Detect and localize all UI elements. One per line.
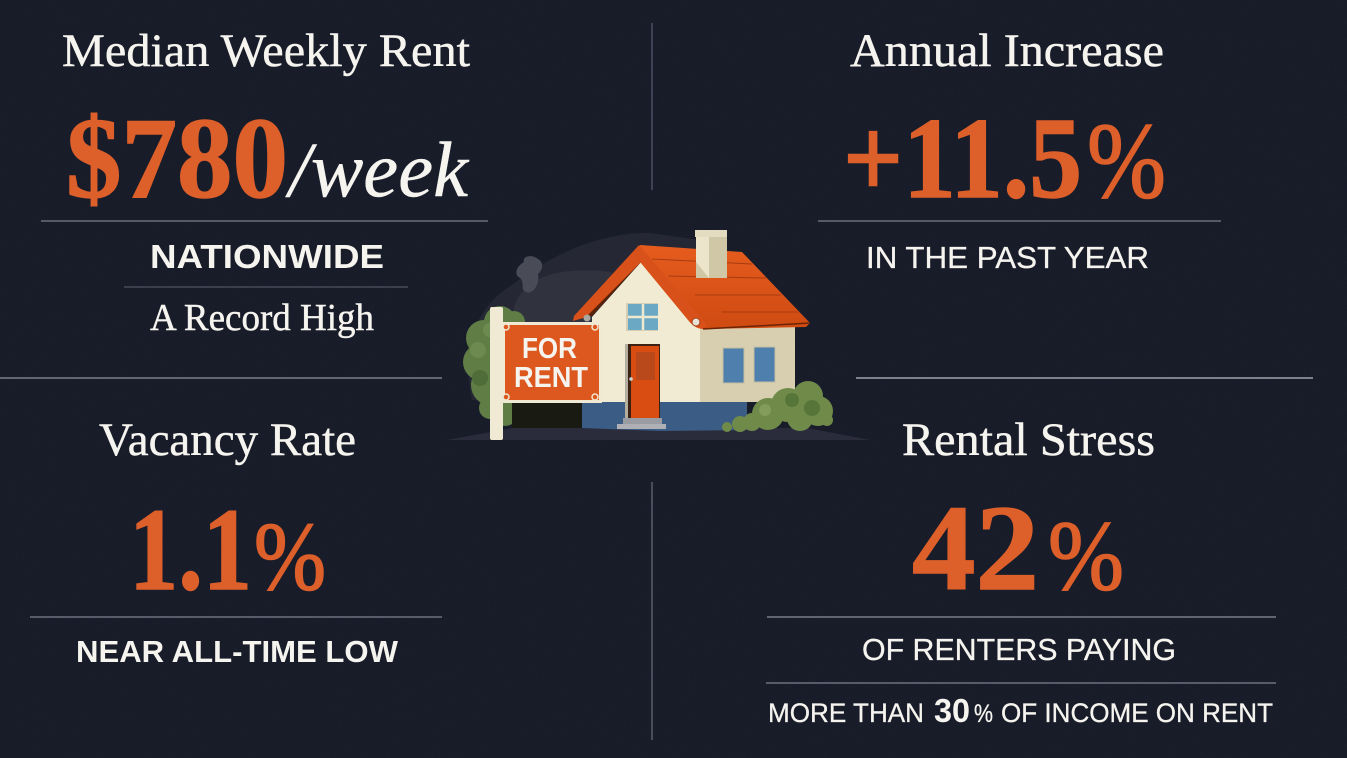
ground — [447, 428, 870, 440]
bush — [722, 381, 833, 432]
note: more than 30% of income on rent: % — [974, 700, 993, 728]
foundation — [582, 402, 747, 431]
illustration: house with for rent sign — [447, 230, 870, 440]
for rent sign: RENT — [514, 362, 588, 394]
label: in the past year: IN THE PAST YEAR — [866, 240, 1149, 275]
figure: +11.5%: % — [1087, 102, 1166, 221]
figure: $780: $780 — [66, 95, 288, 222]
backdrop glow — [468, 233, 700, 400]
note: more than 30% of income on rent: MORE THAN — [768, 698, 924, 728]
label: near all-time low: NEAR ALL-TIME LOW — [76, 634, 399, 669]
sign post — [490, 307, 503, 440]
figure: 1.1%: 1.1 — [129, 484, 252, 615]
label: nationwide: NATIONWIDE — [150, 238, 384, 275]
panel: vacancy rate — [30, 414, 442, 669]
figure: 42%: % — [1048, 500, 1124, 611]
heading: vacancy rate: Vacancy Rate — [99, 414, 356, 466]
note: more than 30% of income on rent: OF INCOME ON RENT — [1001, 698, 1273, 728]
figure: 1.1%: % — [254, 503, 326, 610]
chimney — [695, 230, 727, 278]
gable window — [626, 303, 658, 331]
for rent sign: FOR — [522, 333, 577, 365]
figure unit: per week: /week — [285, 126, 469, 213]
panel: rental stress — [766, 414, 1276, 729]
panel: annual increase — [818, 25, 1221, 275]
figure: 42% — [912, 481, 1124, 616]
for rent sign — [503, 322, 602, 403]
note: more than 30% of income on rent: 30 — [934, 692, 970, 729]
note: a record high: A Record High — [150, 297, 374, 339]
side windows — [723, 347, 775, 383]
roof — [573, 245, 810, 329]
heading: annual increase: Annual Increase — [850, 25, 1164, 77]
figure: 42%: 42 — [912, 481, 1039, 616]
heading: rental stress: Rental Stress — [902, 414, 1155, 466]
note: more than 30% of income on rent — [768, 692, 1273, 729]
smoke — [516, 256, 542, 293]
label: of renters paying: OF RENTERS PAYING — [862, 632, 1176, 667]
house dark underside — [512, 403, 584, 428]
side wall — [700, 326, 795, 402]
door — [625, 344, 660, 418]
tree — [463, 306, 525, 426]
steps — [617, 418, 666, 429]
front wall — [592, 262, 700, 402]
heading: median weekly rent: Median Weekly Rent — [62, 25, 470, 77]
figure: +11.5%: +11.5 — [843, 95, 1082, 223]
panel: median weekly rent — [41, 25, 488, 339]
